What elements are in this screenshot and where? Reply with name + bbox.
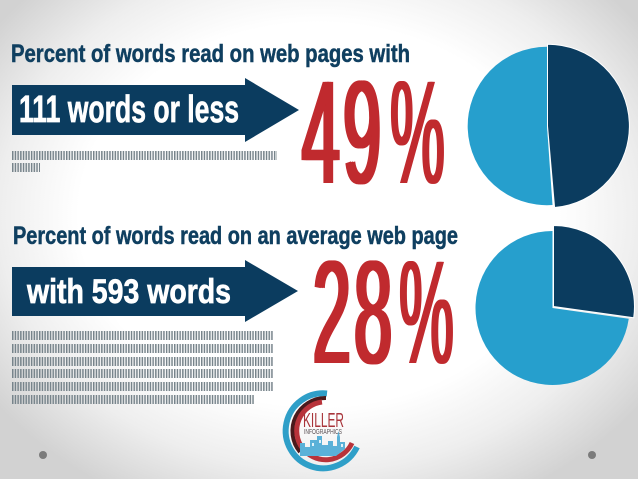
word bars: 111 words: [12, 151, 277, 172]
word bars: 593 words: [12, 331, 273, 404]
heading: average web page: Percent of words read on an average web page: [13, 222, 458, 250]
statistic: 28: 28: [313, 231, 396, 395]
heading: words read with 111 words or less: Percent of words read on web pages with: [11, 40, 410, 68]
logo: Killer Infographics: [286, 393, 357, 468]
arrow: 111 words or less: 111 words or less: [19, 89, 239, 131]
statistic: 28 percent sign: %: [399, 231, 454, 395]
statistic: 49 percent sign: %: [390, 51, 445, 215]
decorative dot left: [39, 451, 47, 459]
arrow: 111 words or less: [12, 78, 299, 142]
statistic: 49: 49: [302, 51, 385, 215]
logo rings: [286, 393, 357, 468]
pie chart: 49%: [468, 44, 629, 208]
logo subtitle: INFOGRAPHICS: [304, 429, 342, 436]
arrow: with 593 words: with 593 words: [26, 273, 231, 311]
decorative dot right: [588, 451, 596, 459]
arrow: with 593 words: [12, 260, 298, 322]
logo skyline: [300, 431, 345, 456]
pie chart: 28%: [475, 226, 634, 385]
logo wordmark: KILLER: [303, 410, 344, 432]
